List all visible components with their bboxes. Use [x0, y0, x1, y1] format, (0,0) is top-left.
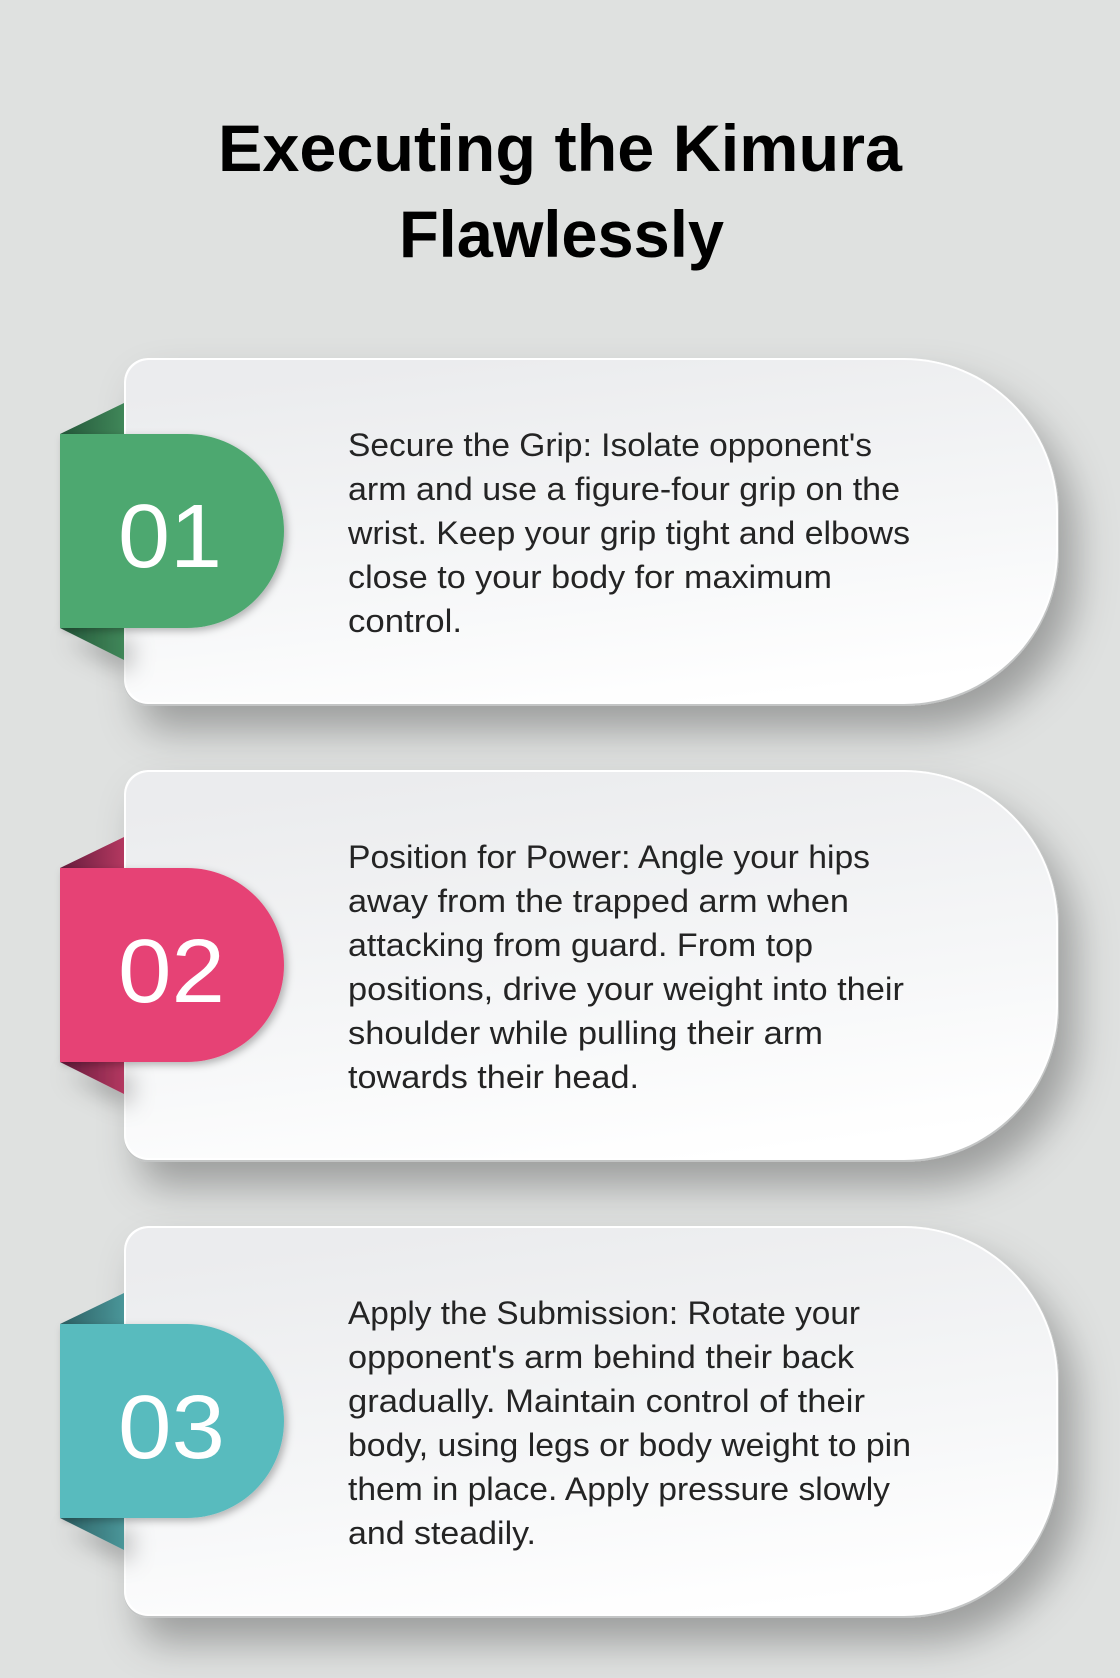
ribbon fold 03 bottom	[60, 1518, 124, 1550]
text: step 03: Apply the Submission: Rotate your	[348, 1295, 860, 1331]
title	[218, 111, 903, 271]
number 02: 02	[118, 922, 225, 1022]
ribbon fold 03 top	[60, 1293, 124, 1324]
text: step 03: gradually. Maintain control of their	[348, 1383, 865, 1419]
text: step 01: close to your body for maximum	[348, 559, 832, 595]
panel: step 03	[60, 1226, 1059, 1618]
text: step 03: and steadily.	[348, 1515, 536, 1551]
text: step 02: Position for Power: Angle your hips	[348, 839, 870, 875]
ribbon fold 01 top	[60, 403, 124, 434]
text: step 01	[347, 427, 910, 639]
panel: step 01	[60, 358, 1059, 706]
badge 03	[60, 1324, 284, 1518]
card 02	[124, 770, 1059, 1162]
title: Flawlessly	[399, 197, 724, 271]
text: step 01: Secure the Grip: Isolate opponent's	[348, 427, 872, 463]
text: step 02: towards their head.	[348, 1059, 639, 1095]
number 01: 01	[118, 487, 222, 587]
text: step 01: wrist. Keep your grip tight and elbows	[347, 515, 910, 551]
badge 01	[60, 434, 284, 628]
card 03	[124, 1226, 1059, 1618]
ribbon fold 02 top	[60, 837, 124, 868]
card 01	[124, 358, 1059, 706]
text: step 02: attacking from guard. From top	[348, 927, 813, 963]
text: step 01: arm and use a figure-four grip on the	[348, 471, 900, 507]
text: step 02: shoulder while pulling their arm	[348, 1015, 823, 1051]
number 03: 03	[118, 1378, 225, 1478]
text: step 01: control.	[348, 603, 462, 639]
text: step 02: away from the trapped arm when	[348, 883, 849, 919]
text: step 02: positions, drive your weight into their	[348, 971, 904, 1007]
title: Executing the Kimura	[218, 111, 903, 185]
text: step 03	[348, 1295, 911, 1551]
text: step 03: opponent's arm behind their back	[348, 1339, 855, 1375]
ribbon fold 01 bottom	[60, 628, 124, 660]
text: step 03: them in place. Apply pressure slowly	[348, 1471, 891, 1507]
text: step 02	[348, 839, 904, 1095]
ribbon fold 02 bottom	[60, 1062, 124, 1094]
text: step 03: body, using legs or body weight to pin	[348, 1427, 911, 1463]
badge 02	[60, 868, 284, 1062]
panel: step 02	[60, 770, 1059, 1162]
